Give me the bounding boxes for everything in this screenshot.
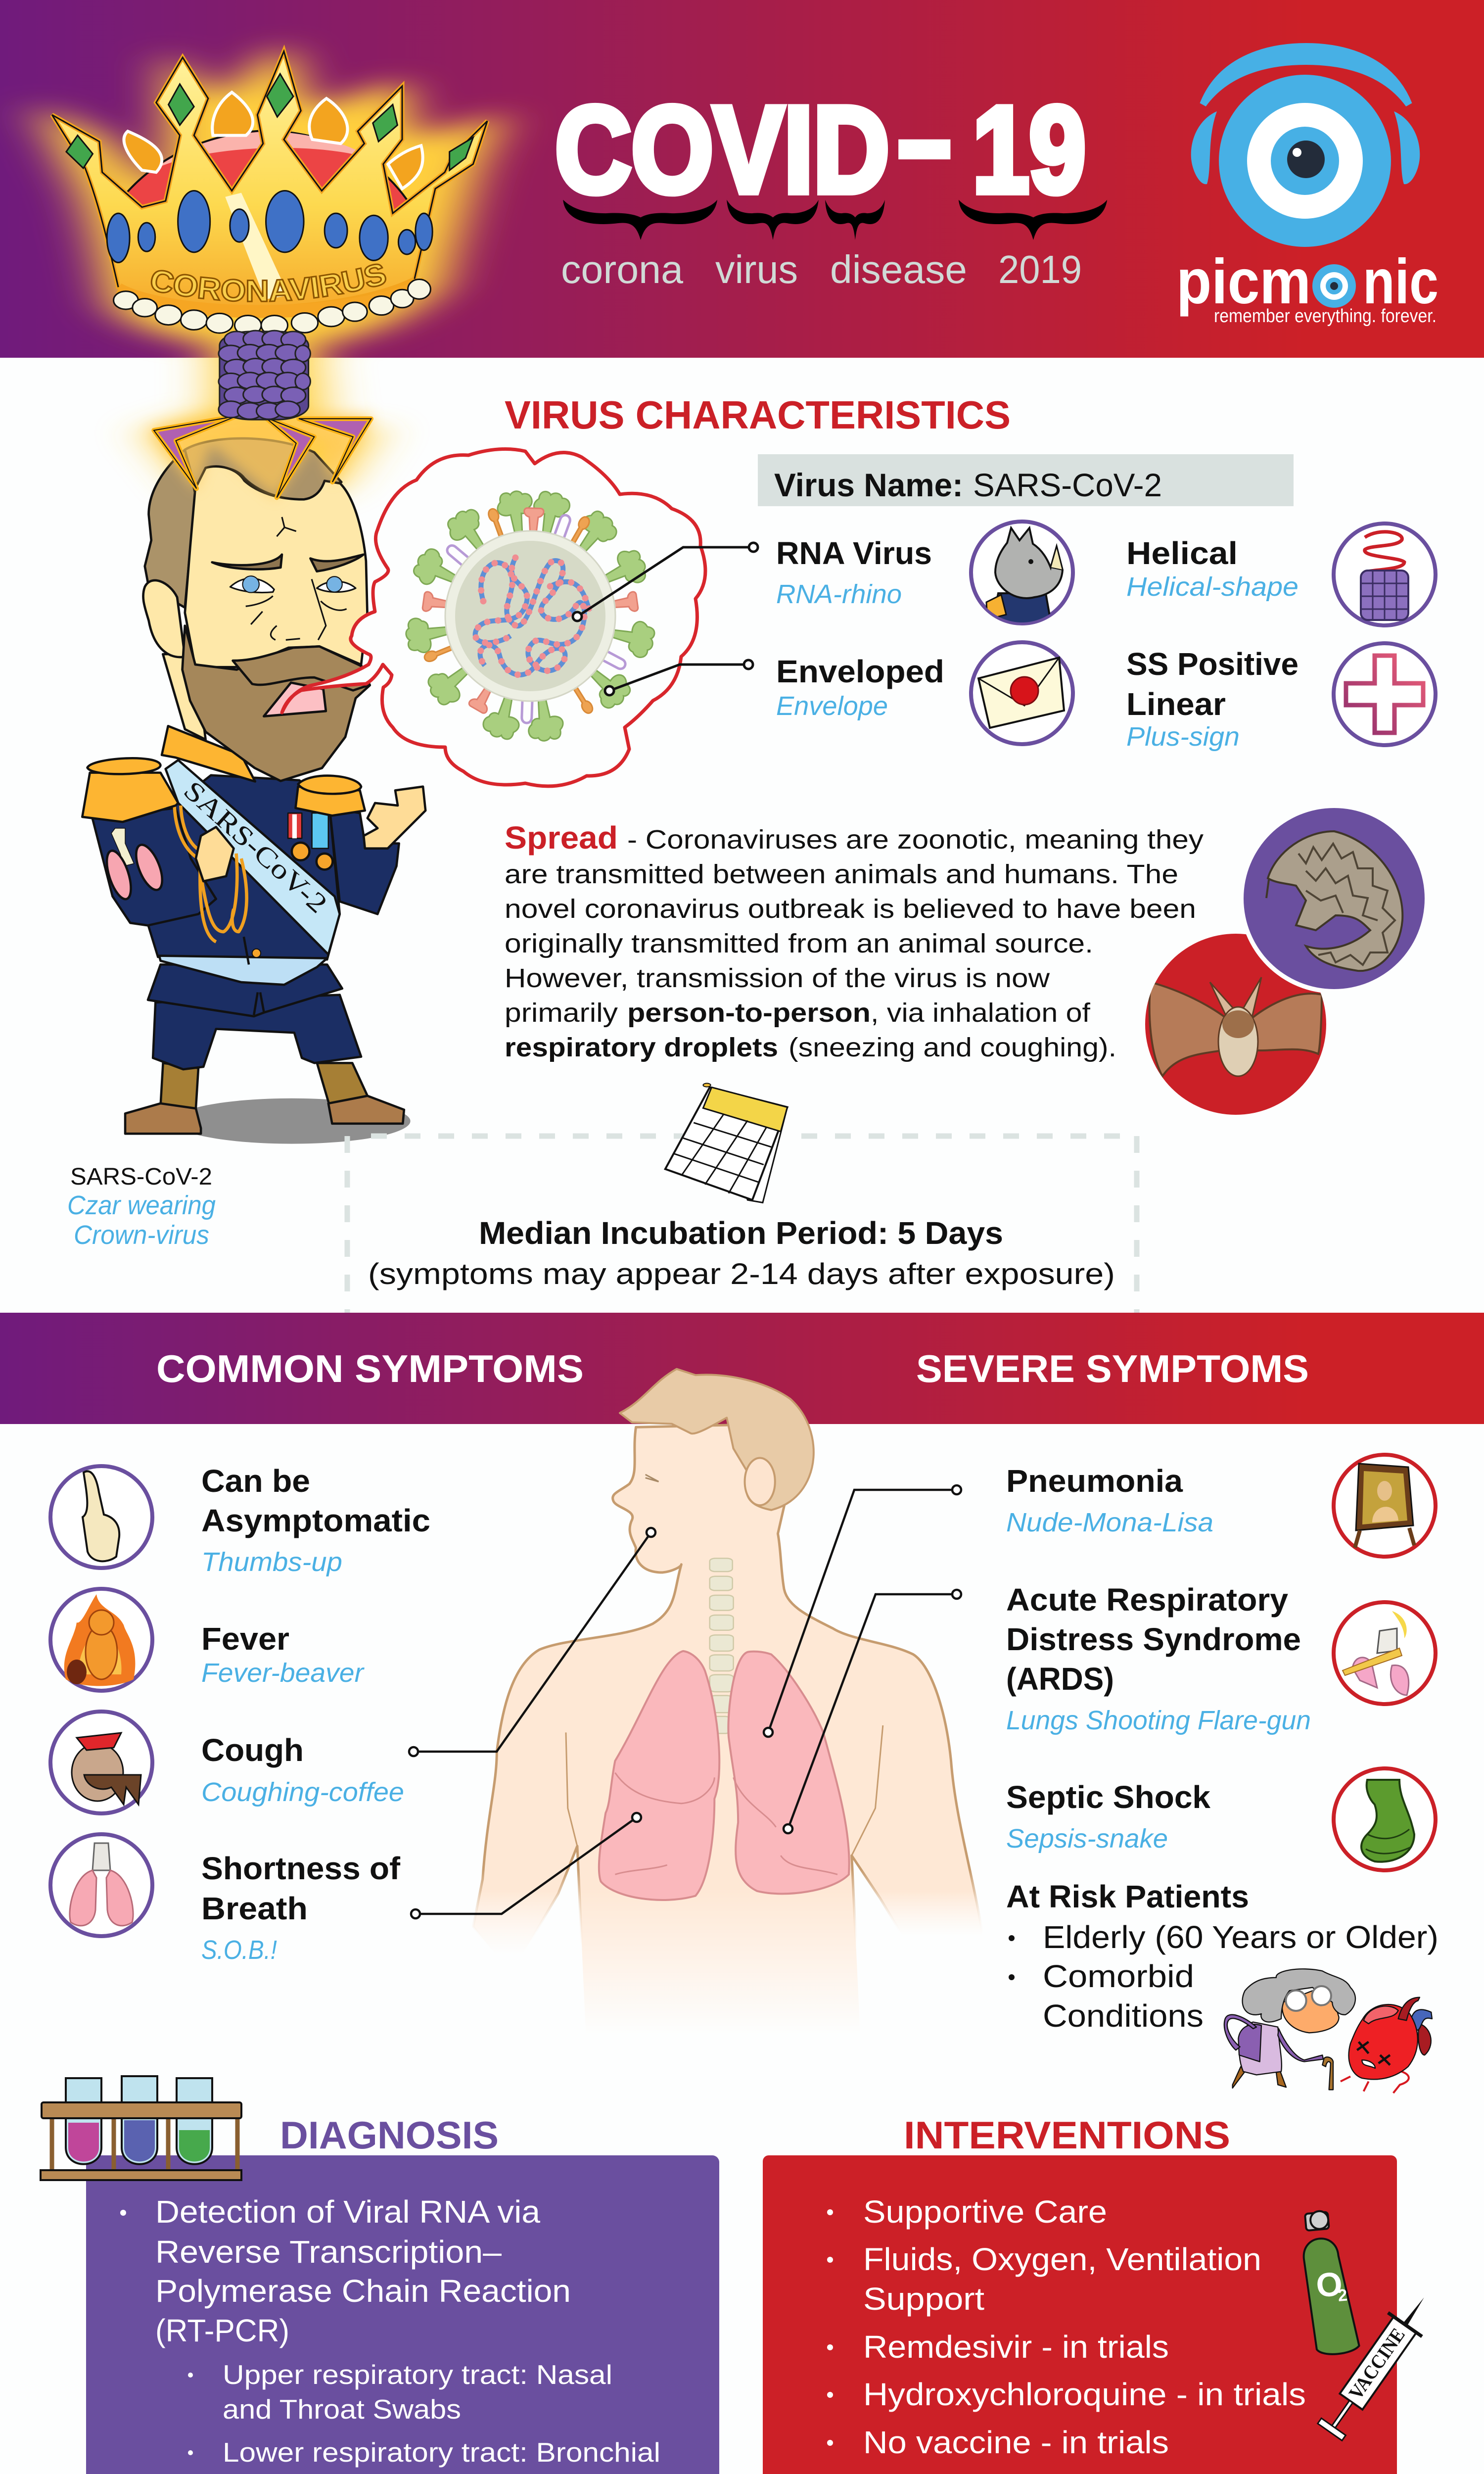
icon: pangolin xyxy=(1239,804,1429,994)
logo: picmonic eye and headphones xyxy=(1191,47,1420,247)
czar figure: body xyxy=(82,726,425,1144)
title braces xyxy=(563,200,1107,240)
panel: diagnosis: Reverse Transcription– xyxy=(155,2234,502,2270)
spread text block: , via inhalation of xyxy=(871,998,1091,1028)
label: septic shock xyxy=(1006,1779,1210,1854)
title: COVID-19: COVID xyxy=(555,81,889,218)
label: septic shock: Sepsis-snake xyxy=(1006,1824,1168,1854)
czar figure: body: SARS-CoV-2 xyxy=(178,775,333,919)
label: enveloped xyxy=(776,654,944,721)
icon: test tubes xyxy=(41,2076,241,2180)
panel: interventions: Hydroxychloroquine - in trials xyxy=(863,2377,1306,2412)
at risk patients list: Comorbid xyxy=(1043,1958,1194,1994)
heading: diagnosis: DIAGNOSIS xyxy=(280,2113,499,2157)
spread text block: - Coronaviruses are zoonotic, meaning they xyxy=(627,825,1204,855)
leader line: shortness of breath xyxy=(411,1813,641,1918)
label: can be asymptomatic: Can be xyxy=(201,1463,310,1499)
leader line: enveloped xyxy=(605,660,753,695)
label: RNA virus xyxy=(776,535,932,609)
panel: interventions: Fluids, Oxygen, Ventilation xyxy=(863,2241,1261,2277)
label: enveloped: Enveloped xyxy=(776,654,944,689)
at risk patients list: Conditions xyxy=(1043,1998,1204,2034)
heading: interventions: INTERVENTIONS xyxy=(904,2113,1230,2157)
label: pneumonia xyxy=(1006,1463,1213,1537)
icon: elderly woman xyxy=(1224,1969,1355,2090)
human body with lungs xyxy=(454,1369,997,2053)
spread text block: respiratory droplets xyxy=(505,1033,778,1062)
thought cloud with virus xyxy=(282,449,705,786)
spread text block: However, transmission of the virus is now xyxy=(505,963,1050,993)
label: can be asymptomatic xyxy=(201,1463,430,1577)
icon: oxygen tank: O xyxy=(1314,2265,1344,2305)
panel: diagnosis xyxy=(86,2155,719,2474)
label: SS positive linear xyxy=(1126,646,1298,752)
panel: diagnosis: Detection of Viral RNA via xyxy=(155,2194,540,2230)
icon: rhino xyxy=(971,522,1073,627)
label: RNA virus: RNA-rhino xyxy=(776,579,902,609)
heading: virus characteristics: VIRUS CHARACTERISTICS xyxy=(505,393,1011,437)
incubation text: (symptoms may appear 2-14 days after exposure) xyxy=(368,1257,1115,1290)
at risk patients list: Elderly (60 Years or Older) xyxy=(1043,1919,1438,1955)
logo wordmark: picm xyxy=(1176,246,1311,317)
icon: calendar xyxy=(665,1083,788,1203)
spread text block: originally transmitted from an animal source. xyxy=(505,929,1093,958)
label: fever: Fever xyxy=(201,1621,289,1657)
spread text block: (sneezing and coughing). xyxy=(788,1033,1116,1062)
spread text block: novel coronavirus outbreak is believed to have been xyxy=(505,894,1196,924)
label: SS positive linear: Linear xyxy=(1126,686,1226,722)
icon: failing heart xyxy=(1341,1998,1432,2093)
virus name box: Virus Name: xyxy=(774,467,963,503)
icon: plus sign xyxy=(1334,643,1436,745)
acronym words: virus xyxy=(715,247,798,291)
czar caption: Crown-virus xyxy=(74,1220,209,1250)
virus name box xyxy=(758,454,1294,506)
title: COVID-19: 19 xyxy=(973,81,1086,218)
label: pneumonia: Nude-Mona-Lisa xyxy=(1006,1508,1213,1537)
incubation text: Median Incubation Period: 5 Days xyxy=(479,1215,1003,1251)
label: shortness of breath: Shortness of xyxy=(201,1851,401,1886)
incubation text xyxy=(368,1215,1115,1290)
panel: diagnosis: (RT-PCR) xyxy=(155,2313,289,2348)
panel: interventions: Remdesivir - in trials xyxy=(863,2329,1169,2365)
spread text block xyxy=(505,820,1204,1062)
czar caption: Czar wearing xyxy=(67,1190,216,1220)
icon: oxygen tank xyxy=(1300,2209,1360,2356)
label: shortness of breath: S.O.B.! xyxy=(201,1935,277,1965)
panel: interventions: Support xyxy=(863,2281,984,2317)
label: helical xyxy=(1126,535,1298,602)
label: enveloped: Envelope xyxy=(776,691,888,721)
label: shortness of breath xyxy=(201,1851,401,1965)
icon: vaccine syringe xyxy=(1313,2285,1441,2444)
leader line: pneumonia xyxy=(764,1485,961,1737)
spread text block: Spread xyxy=(505,820,618,856)
label: RNA virus: RNA Virus xyxy=(776,535,932,571)
label: ARDS: Lungs Shooting Flare-gun xyxy=(1006,1706,1311,1735)
icon: thumbs up xyxy=(50,1466,152,1568)
label: cough xyxy=(201,1732,404,1807)
panel: interventions xyxy=(763,2155,1397,2474)
leader line: RNA virus xyxy=(573,543,758,621)
acronym words xyxy=(561,247,1082,291)
at risk patients list: At Risk Patients xyxy=(1006,1879,1249,1914)
icon: oxygen tank: 2 xyxy=(1337,2286,1348,2305)
label: shortness of breath: Breath xyxy=(201,1891,308,1926)
logo wordmark: nic xyxy=(1363,246,1438,317)
czar caption: SARS-CoV-2 xyxy=(70,1164,212,1190)
panel: diagnosis: Lower respiratory tract: Bronchial xyxy=(223,2437,660,2468)
heading: common symptoms: COMMON SYMPTOMS xyxy=(156,1347,584,1390)
logo wordmark: remember everything. forever. xyxy=(1214,306,1437,327)
leader line: ARDS xyxy=(784,1590,961,1833)
label: fever xyxy=(201,1621,365,1688)
label: ARDS xyxy=(1006,1582,1311,1735)
panel: diagnosis: Upper respiratory tract: Nasal xyxy=(223,2359,612,2390)
label: pneumonia: Pneumonia xyxy=(1006,1463,1183,1499)
incubation dashed box xyxy=(347,1136,1137,1313)
spread text block: are transmitted between animals and humans. The xyxy=(505,859,1178,889)
leader line: cough xyxy=(409,1528,655,1756)
acronym words: corona xyxy=(561,247,684,291)
icon: helical shape xyxy=(1334,523,1436,625)
crown with glow xyxy=(13,36,526,504)
at risk patients list xyxy=(1006,1879,1438,2034)
label: cough: Cough xyxy=(201,1732,304,1768)
icon: envelope xyxy=(971,642,1073,744)
acronym words: 2019 xyxy=(998,247,1082,291)
label: ARDS: (ARDS) xyxy=(1006,1661,1114,1697)
icon: fever beaver xyxy=(50,1589,152,1691)
acronym words: disease xyxy=(830,247,967,291)
icon: coughing coffee xyxy=(50,1712,152,1813)
icon: bat xyxy=(1145,934,1326,1115)
label: SS positive linear: Plus-sign xyxy=(1126,722,1240,752)
label: helical: Helical xyxy=(1126,535,1238,571)
icon: vaccine syringe: VACCINE xyxy=(1344,2324,1409,2404)
icon: lungs shooting flare-gun xyxy=(1334,1602,1436,1704)
label: fever: Fever-beaver xyxy=(201,1658,365,1688)
czar caption xyxy=(67,1164,216,1250)
title: COVID-19: - xyxy=(890,41,959,229)
label: ARDS: Distress Syndrome xyxy=(1006,1621,1301,1657)
header band xyxy=(0,0,1484,358)
panel: diagnosis: Polymerase Chain Reaction xyxy=(155,2273,571,2309)
label: can be asymptomatic: Thumbs-up xyxy=(201,1547,342,1577)
label: ARDS: Acute Respiratory xyxy=(1006,1582,1288,1618)
crown lettering xyxy=(148,282,391,301)
label: SS positive linear: SS Positive xyxy=(1126,646,1298,682)
spread text block: person-to-person xyxy=(627,998,871,1028)
nucleocapsid stem xyxy=(219,331,310,420)
panel: diagnosis: and Throat Swabs xyxy=(223,2394,461,2425)
crown with glow: CORONAVIRUS xyxy=(150,263,387,302)
spider legs with glow xyxy=(149,411,374,499)
logo wordmark xyxy=(1176,246,1438,327)
icon: sepsis snake xyxy=(1334,1768,1436,1870)
label: cough: Coughing-coffee xyxy=(201,1777,404,1807)
heading: severe symptoms: SEVERE SYMPTOMS xyxy=(916,1347,1309,1390)
czar figure: head xyxy=(143,438,370,781)
spread text block: primarily xyxy=(505,998,618,1028)
title: COVID-19 xyxy=(555,41,1086,229)
panel: interventions: Supportive Care xyxy=(863,2194,1107,2230)
icon: nude Mona Lisa xyxy=(1334,1455,1436,1557)
symptoms band xyxy=(0,1313,1484,1424)
label: can be asymptomatic: Asymptomatic xyxy=(201,1503,430,1538)
panel: interventions: No vaccine - in trials xyxy=(863,2425,1169,2460)
virus name box: SARS-CoV-2 xyxy=(973,467,1162,503)
label: septic shock: Septic Shock xyxy=(1006,1779,1210,1815)
label: helical: Helical-shape xyxy=(1126,572,1298,602)
icon: short of breath lungs xyxy=(50,1834,152,1936)
